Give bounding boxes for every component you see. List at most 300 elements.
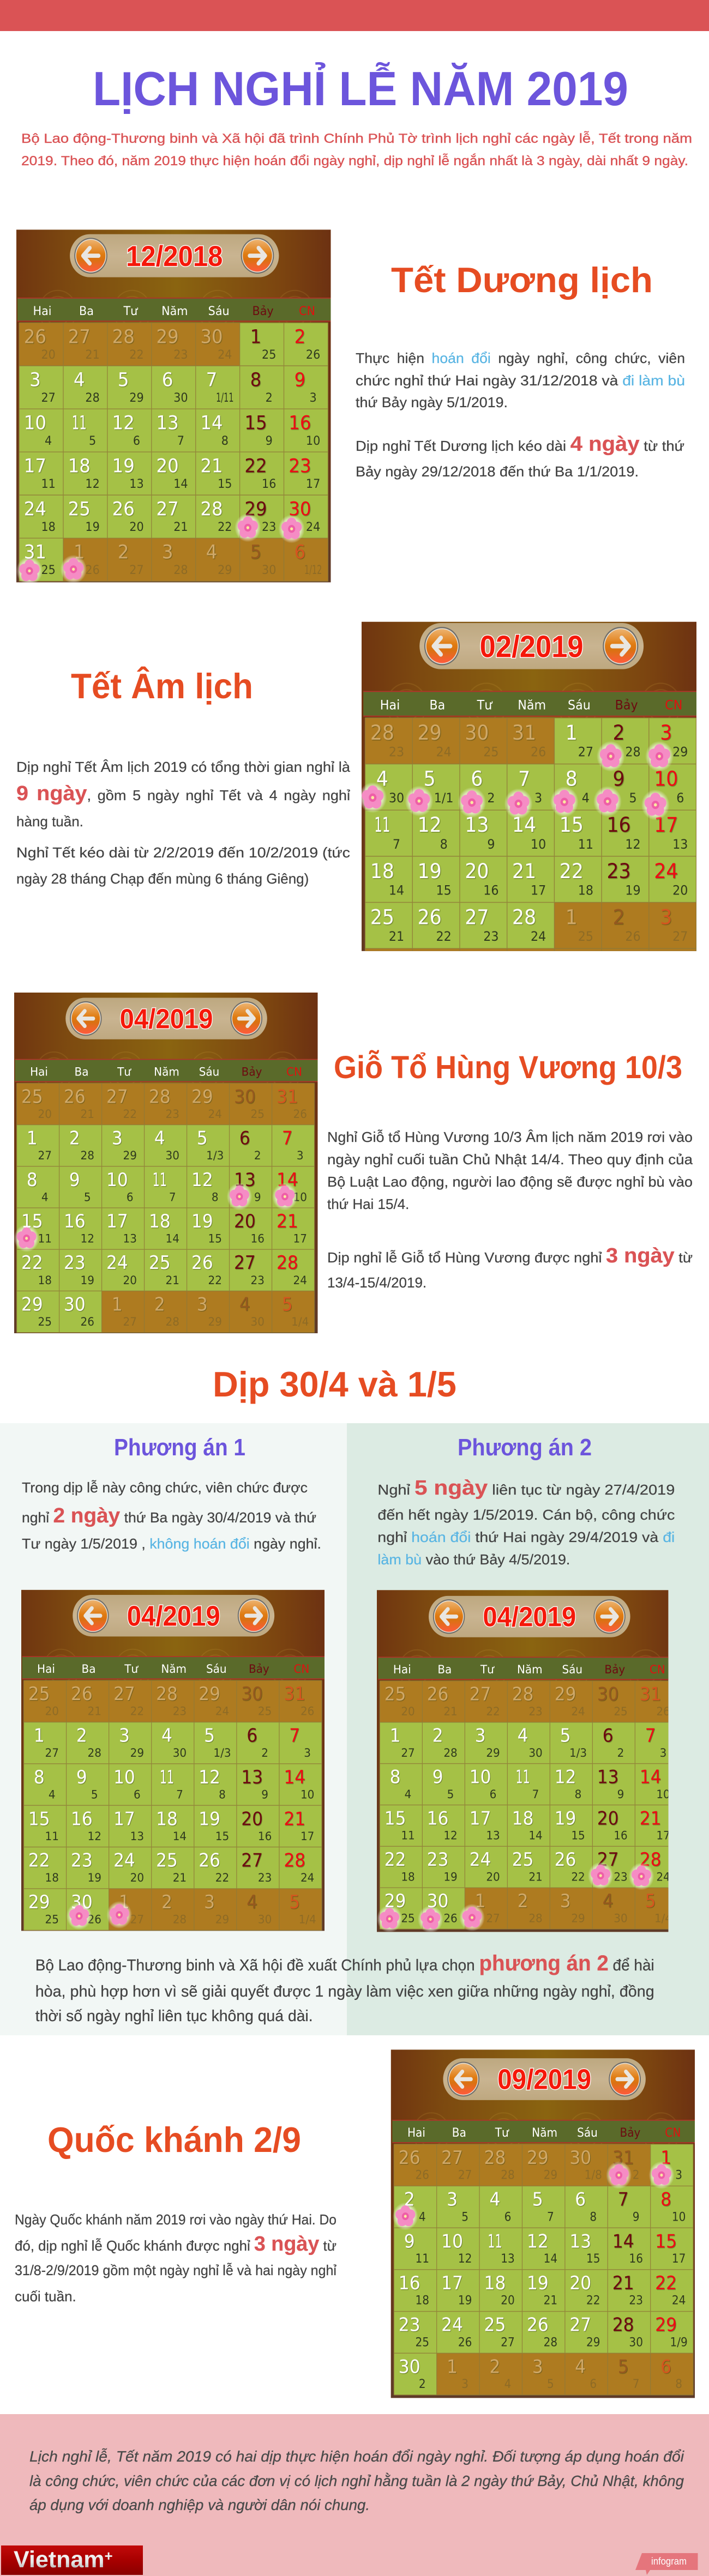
date numbers: 30	[173, 1746, 187, 1759]
date numbers: 27	[458, 2168, 472, 2182]
date numbers: 17	[293, 1232, 307, 1245]
date numbers	[21, 1086, 309, 1328]
date numbers: 1/3	[213, 1746, 231, 1759]
holiday flower markers	[67, 1901, 132, 1930]
date numbers: 5	[282, 1293, 293, 1315]
date numbers: 11	[415, 2252, 429, 2265]
month navigation: previous arrow	[447, 2062, 479, 2096]
date numbers: 26	[656, 1704, 670, 1718]
date numbers: 19	[625, 883, 641, 898]
date numbers: 21	[173, 1871, 187, 1884]
date numbers: 13	[501, 2252, 515, 2265]
date numbers: 15	[586, 2252, 600, 2265]
month title: 02/2019	[480, 628, 584, 664]
month title: 04/2019	[120, 1003, 213, 1035]
date numbers: 15	[560, 813, 584, 837]
date numbers: 31	[612, 2147, 634, 2168]
date numbers: 4	[405, 1787, 411, 1801]
month navigation: next arrow	[241, 238, 274, 274]
date numbers: 1/3	[206, 1148, 224, 1162]
date numbers: 5	[89, 434, 96, 448]
date numbers: 21	[640, 1807, 661, 1829]
date numbers: 9	[266, 434, 273, 448]
date numbers: 13	[672, 837, 688, 852]
date numbers: 6	[504, 2210, 511, 2224]
date numbers: 13	[157, 412, 179, 434]
date numbers: 21	[166, 1273, 179, 1287]
date numbers: 30	[614, 1912, 628, 1925]
date numbers: 20	[45, 1704, 59, 1718]
date numbers: 16	[258, 1829, 272, 1843]
date numbers: 30	[528, 1746, 543, 1759]
date numbers: 22	[244, 455, 267, 477]
date numbers: 10	[672, 2210, 686, 2224]
date numbers: 28	[625, 745, 641, 760]
date numbers: 12	[112, 412, 135, 434]
date numbers: 5	[461, 2210, 468, 2224]
date numbers: 19	[112, 455, 135, 477]
text: phương án 2: Nghỉ 5 ngày liên tục từ ngày 27/4/2019	[377, 1477, 675, 1499]
date numbers: 25	[156, 1849, 178, 1871]
date numbers: 26	[85, 563, 100, 577]
date numbers: 29	[571, 1912, 585, 1925]
date numbers: 11	[374, 813, 390, 837]
date numbers: 26	[443, 1912, 458, 1925]
date numbers: 24	[24, 498, 46, 520]
date numbers: 1	[119, 1891, 130, 1913]
date numbers: 20	[569, 2272, 591, 2294]
date numbers: 1	[566, 905, 578, 929]
date numbers: 20	[130, 1871, 144, 1884]
date numbers: 23	[64, 1252, 86, 1274]
date numbers: 31	[512, 721, 536, 745]
date numbers: 18	[156, 1808, 178, 1830]
date numbers: 5	[250, 541, 261, 563]
text: Giỗ Tổ Hùng Vương: 13/4-15/4/2019.	[327, 1274, 426, 1291]
date numbers: 26	[88, 1913, 101, 1926]
date numbers: 17	[106, 1211, 128, 1232]
date numbers: 27	[578, 745, 593, 760]
date numbers: 19	[443, 1870, 458, 1884]
date numbers: 11	[72, 412, 87, 434]
text: Giỗ Tổ Hùng Vương	[327, 1129, 693, 1291]
weekday header: CN	[665, 698, 682, 713]
date numbers: 15	[21, 1211, 43, 1232]
date numbers: 19	[85, 520, 100, 534]
date numbers: 23	[614, 1870, 628, 1884]
date numbers: 22	[215, 1871, 229, 1884]
date numbers: 24	[306, 520, 320, 534]
weekday header: Năm	[532, 2126, 557, 2139]
date numbers: 9	[487, 837, 495, 852]
weekday header	[407, 2126, 681, 2139]
date numbers: 1/4	[654, 1912, 672, 1925]
text: Tết Âm lịch: hàng tuần.	[16, 813, 83, 830]
date numbers: 1/9	[670, 2336, 688, 2349]
date numbers: 14	[200, 412, 223, 434]
date numbers: 25	[68, 498, 91, 520]
date numbers: 6	[590, 2377, 597, 2391]
date numbers: 22	[218, 520, 232, 534]
date numbers: 5	[629, 790, 637, 806]
date numbers: 23	[289, 455, 311, 477]
date numbers: 10	[654, 766, 678, 791]
date numbers: 6	[239, 1127, 250, 1149]
date numbers: 16	[629, 2252, 643, 2265]
weekday header: Sáu	[199, 1065, 219, 1079]
date numbers: 24	[301, 1871, 314, 1884]
date numbers: 4	[154, 1127, 165, 1149]
date numbers: 10	[306, 434, 320, 448]
date numbers: 11	[45, 1829, 59, 1843]
date numbers: 23	[251, 1273, 265, 1287]
date numbers: 28	[88, 1746, 101, 1759]
date numbers: 14	[544, 2252, 557, 2265]
date numbers: 1	[475, 1890, 486, 1912]
date numbers	[24, 325, 322, 577]
date numbers: 2	[154, 1293, 165, 1315]
date numbers: 27	[465, 905, 489, 929]
text: Quốc khánh: đó, dịp nghỉ lễ Quốc khánh được nghỉ 3 ngày từ	[15, 2233, 337, 2255]
date numbers: 26	[555, 1849, 576, 1871]
date numbers: 18	[484, 2272, 506, 2294]
weekday header: Ba	[437, 1662, 452, 1676]
month navigation: previous arrow	[77, 1598, 109, 1633]
date numbers: 26	[399, 2147, 420, 2168]
date numbers: 8	[212, 1190, 219, 1204]
date numbers: 20	[241, 1808, 263, 1830]
date numbers: 8	[440, 837, 448, 852]
weekday header: Bảy	[604, 1662, 625, 1676]
date numbers: 22	[208, 1273, 222, 1287]
date numbers: 21	[544, 2294, 557, 2307]
text: phương án 1: nghỉ 2 ngày thứ Ba ngày 30/4/2019 và thứ	[22, 1504, 316, 1527]
weekday header	[30, 1065, 302, 1079]
date numbers: 11	[38, 1232, 52, 1245]
date numbers: 11	[488, 2230, 502, 2252]
date numbers: 5	[424, 766, 436, 791]
date numbers: 9	[69, 1169, 80, 1190]
date numbers: 20	[234, 1211, 256, 1232]
intro text	[21, 131, 692, 168]
date numbers: 3	[29, 368, 41, 391]
date numbers: 29	[157, 325, 179, 348]
date numbers: 6	[575, 2188, 586, 2210]
date numbers: 25	[401, 1912, 415, 1925]
date numbers: 3	[660, 905, 672, 929]
date numbers: 25	[45, 1913, 59, 1926]
date numbers: 7	[618, 2188, 629, 2210]
date numbers: 19	[555, 1807, 576, 1829]
date numbers: 12	[88, 1829, 101, 1843]
date numbers: 24	[470, 1849, 491, 1871]
logo: Vietnam+	[1, 2545, 143, 2575]
date numbers: 17	[301, 1829, 314, 1843]
logo: Vietnam+: +	[105, 2548, 113, 2564]
in-month cells	[394, 2144, 693, 2395]
date numbers: 15	[571, 1829, 585, 1842]
footer note: áp dụng với doanh nghiệp và người dân nói chung.	[29, 2496, 370, 2513]
date numbers: 21	[512, 858, 536, 883]
date numbers: 28	[277, 1252, 298, 1274]
date numbers: 27	[569, 2314, 591, 2336]
date numbers: 8	[390, 1766, 401, 1788]
date numbers: 30	[629, 2336, 643, 2349]
date numbers: 5	[118, 368, 129, 391]
date numbers: 23	[71, 1849, 93, 1871]
text: Giỗ Tổ Hùng Vương: Nghỉ Giỗ tổ Hùng Vương 10/3 Âm lịch năm 2019 rơi vào	[327, 1129, 693, 1145]
date numbers: 4	[376, 766, 388, 791]
date numbers: 2	[266, 391, 273, 405]
weekday header: Hai	[393, 1662, 411, 1676]
month navigation: next arrow	[603, 627, 638, 666]
date numbers: 25	[578, 929, 593, 944]
date numbers: 28	[528, 1912, 543, 1925]
date numbers: 12	[418, 813, 442, 837]
date numbers: 8	[660, 2188, 671, 2210]
date numbers	[370, 721, 688, 944]
heading: Tết Dương lịch: Tết Dương lịch	[391, 260, 653, 300]
holiday flower markers	[16, 513, 305, 585]
date numbers: 4	[504, 2377, 511, 2391]
date numbers: 27	[130, 1913, 144, 1926]
date numbers: 30	[389, 790, 404, 806]
weekday header: Bảy	[249, 1662, 269, 1676]
date numbers: 17	[113, 1808, 135, 1830]
in-month cells	[365, 718, 696, 948]
date numbers: 22	[436, 929, 452, 944]
date numbers: 8	[575, 1787, 581, 1801]
date numbers: 7	[518, 766, 530, 791]
month navigation: next arrow	[609, 2062, 641, 2096]
date numbers: 17	[24, 455, 46, 477]
date numbers: 28	[544, 2336, 557, 2349]
text: phương án 2: đến hết ngày 1/5/2019. Cán bộ, công chức	[377, 1507, 675, 1523]
holiday flower markers	[377, 1862, 654, 1933]
text: Giỗ Tổ Hùng Vương: Dịp nghỉ lễ Giỗ tổ Hùng Vương được nghỉ 3 ngày từ	[327, 1244, 693, 1267]
date numbers: 2	[261, 1746, 268, 1759]
date numbers: 26	[527, 2314, 549, 2336]
date numbers: 15	[218, 477, 232, 491]
weekday header: Tư	[123, 304, 138, 318]
date numbers: 28	[512, 905, 536, 929]
weekday header: CN	[665, 2126, 681, 2139]
date numbers: 22	[586, 2294, 600, 2307]
date numbers: 25	[21, 1086, 43, 1108]
weekday header	[37, 1662, 309, 1676]
date numbers: 5	[204, 1725, 215, 1746]
date numbers: 18	[38, 1273, 52, 1287]
date numbers: 3	[197, 1293, 208, 1315]
date numbers: 4	[247, 1891, 257, 1913]
date numbers: 2	[76, 1725, 87, 1746]
weekday header: Tư	[117, 1065, 132, 1079]
date numbers: 26	[199, 1849, 220, 1871]
date numbers: 2	[404, 2188, 415, 2210]
date numbers: 20	[672, 883, 688, 898]
date numbers: 8	[250, 368, 261, 391]
weekday header: Sáu	[568, 698, 591, 713]
date numbers: 8	[566, 766, 578, 791]
date numbers: 27	[501, 2336, 515, 2349]
date numbers: 29	[123, 1148, 137, 1162]
badge: infogram: infogram	[651, 2556, 687, 2567]
date numbers: 29	[544, 2168, 557, 2182]
date numbers: 12	[443, 1829, 458, 1842]
date numbers: 13	[130, 1829, 144, 1843]
date numbers: 16	[606, 813, 631, 837]
date numbers: 25	[384, 1684, 406, 1705]
date numbers: 25	[415, 2336, 429, 2349]
date numbers: 21	[88, 1704, 101, 1718]
date numbers: 30	[173, 391, 188, 405]
date numbers: 28	[173, 1913, 187, 1926]
text: phương án 2: nghỉ hoán đổi thứ Hai ngày 29/4/2019 và đi	[377, 1529, 675, 1545]
text: Tết Dương lịch: thứ Bảy ngày 5/1/2019.	[356, 394, 508, 410]
holiday flower markers	[358, 741, 674, 820]
date numbers: 26	[458, 2336, 472, 2349]
date numbers: 1/4	[299, 1913, 316, 1926]
date numbers: 1/1	[434, 790, 454, 806]
date numbers: 3	[297, 1148, 304, 1162]
calendar: 04/2019 phương án 2	[377, 1590, 672, 1932]
weekday header: Bảy	[253, 304, 274, 318]
heading: Phương án 1: Phương án 1	[114, 1434, 245, 1461]
heading: Quốc khánh 2/9: Quốc khánh 2/9	[47, 2120, 301, 2160]
date numbers: 27	[106, 1086, 128, 1108]
date numbers: 26	[71, 1683, 93, 1704]
date numbers: 7	[393, 837, 400, 852]
date numbers: 29	[129, 391, 144, 405]
date numbers: 4	[206, 541, 217, 563]
date numbers: 27	[68, 325, 91, 348]
date numbers: 10	[24, 412, 46, 434]
date numbers: 25	[370, 905, 394, 929]
date numbers: 27	[401, 1746, 415, 1759]
date numbers: 26	[81, 1315, 94, 1328]
calendar: 04/2019 (Giỗ Tổ)	[14, 993, 317, 1333]
date numbers: 7	[176, 1788, 183, 1801]
top banner	[0, 0, 709, 31]
holiday flower markers	[14, 1183, 298, 1252]
weekday header: Tư	[495, 2126, 509, 2139]
date numbers: 13	[234, 1169, 256, 1190]
date numbers: 28	[484, 2147, 506, 2168]
date numbers: 26	[24, 325, 46, 348]
month navigation: next arrow	[593, 1599, 626, 1634]
date numbers: 28	[501, 2168, 515, 2182]
date numbers: 18	[512, 1807, 533, 1829]
date numbers: 24	[441, 2314, 463, 2336]
date numbers: 13	[597, 1766, 618, 1788]
text: đề xuất phương án 2: Bộ Lao động-Thương binh và Xã hội đề xuất Chính phủ lựa chọn phương án 2 để hài	[35, 1951, 654, 1975]
date numbers: 21	[200, 455, 223, 477]
date numbers: 6	[134, 1788, 141, 1801]
date numbers: 21	[277, 1211, 298, 1232]
date numbers: 3	[675, 2168, 682, 2182]
date numbers: 2	[633, 2168, 640, 2182]
date numbers: 14	[389, 883, 404, 898]
date numbers: 21	[443, 1704, 458, 1718]
date numbers: 6	[162, 368, 173, 391]
date numbers: 19	[191, 1211, 213, 1232]
date numbers: 13	[569, 2230, 591, 2252]
month title: 04/2019	[127, 1600, 220, 1632]
date numbers: 4	[45, 434, 52, 448]
date numbers: 25	[149, 1252, 171, 1274]
date numbers: 28	[640, 1849, 661, 1871]
date numbers: 23	[262, 520, 276, 534]
calendar: 12/2018	[16, 229, 331, 582]
date numbers: 1/3	[569, 1746, 587, 1759]
date numbers: 30	[200, 325, 223, 348]
date numbers: 17	[441, 2272, 463, 2294]
date numbers: 3	[304, 1746, 311, 1759]
date numbers: 17	[654, 813, 678, 837]
date numbers: 11	[41, 477, 56, 491]
date numbers: 10	[113, 1767, 135, 1788]
date numbers: 30	[262, 563, 276, 577]
weekday header: Năm	[517, 1662, 543, 1676]
date numbers: 28	[112, 325, 135, 348]
date numbers: 23	[629, 2294, 643, 2307]
date numbers: 27	[597, 1849, 618, 1871]
heading: Tết Âm lịch: Tết Âm lịch	[71, 666, 253, 706]
date numbers: 26	[293, 1107, 307, 1121]
date numbers	[384, 1684, 672, 1925]
date numbers: 2	[613, 721, 625, 745]
date numbers: 16	[251, 1232, 265, 1245]
date numbers: 3	[660, 1746, 666, 1759]
text: Tết Âm lịch: ngày 28 tháng Chạp đến mùng 6 tháng Giêng)	[16, 870, 309, 887]
date numbers: 9	[261, 1788, 268, 1801]
date numbers: 29	[555, 1684, 576, 1705]
date numbers: 16	[64, 1211, 86, 1232]
date numbers: 18	[41, 520, 56, 534]
date numbers: 6	[676, 790, 684, 806]
date numbers: 23	[173, 1704, 187, 1718]
date numbers: 17	[531, 883, 546, 898]
date numbers: 24	[436, 745, 452, 760]
date numbers: 24	[215, 1704, 229, 1718]
date numbers: 18	[45, 1871, 59, 1884]
date numbers: 2	[432, 1725, 443, 1746]
date numbers: 3	[560, 1890, 571, 1912]
date numbers: 16	[262, 477, 276, 491]
text: đề xuất phương án 2	[35, 1951, 654, 2025]
date numbers: 25	[38, 1315, 52, 1328]
date numbers: 13	[465, 813, 489, 837]
date numbers	[399, 2147, 688, 2391]
text: Tết Dương lịch: Dịp nghỉ Tết Dương lịch kéo dài 4 ngày từ thứ	[356, 433, 684, 456]
date numbers: 1	[660, 2147, 671, 2168]
date numbers: 18	[149, 1211, 171, 1232]
date numbers: 18	[68, 455, 91, 477]
date numbers: 24	[531, 929, 546, 944]
date numbers: 22	[486, 1704, 500, 1718]
date numbers: 7	[282, 1127, 293, 1149]
date numbers: 15	[436, 883, 452, 898]
date numbers: 29	[527, 2147, 549, 2168]
date numbers: 1	[27, 1127, 38, 1149]
date numbers: 11	[160, 1767, 174, 1788]
date numbers: 26	[191, 1252, 213, 1274]
heading: Giỗ Tổ Hùng Vương: Giỗ Tổ Hùng Vương 10/3	[334, 1050, 682, 1085]
date numbers: 29	[130, 1746, 144, 1759]
date numbers: 24	[672, 2294, 686, 2307]
date numbers: 2	[613, 905, 625, 929]
weekday header: Hai	[407, 2126, 425, 2139]
